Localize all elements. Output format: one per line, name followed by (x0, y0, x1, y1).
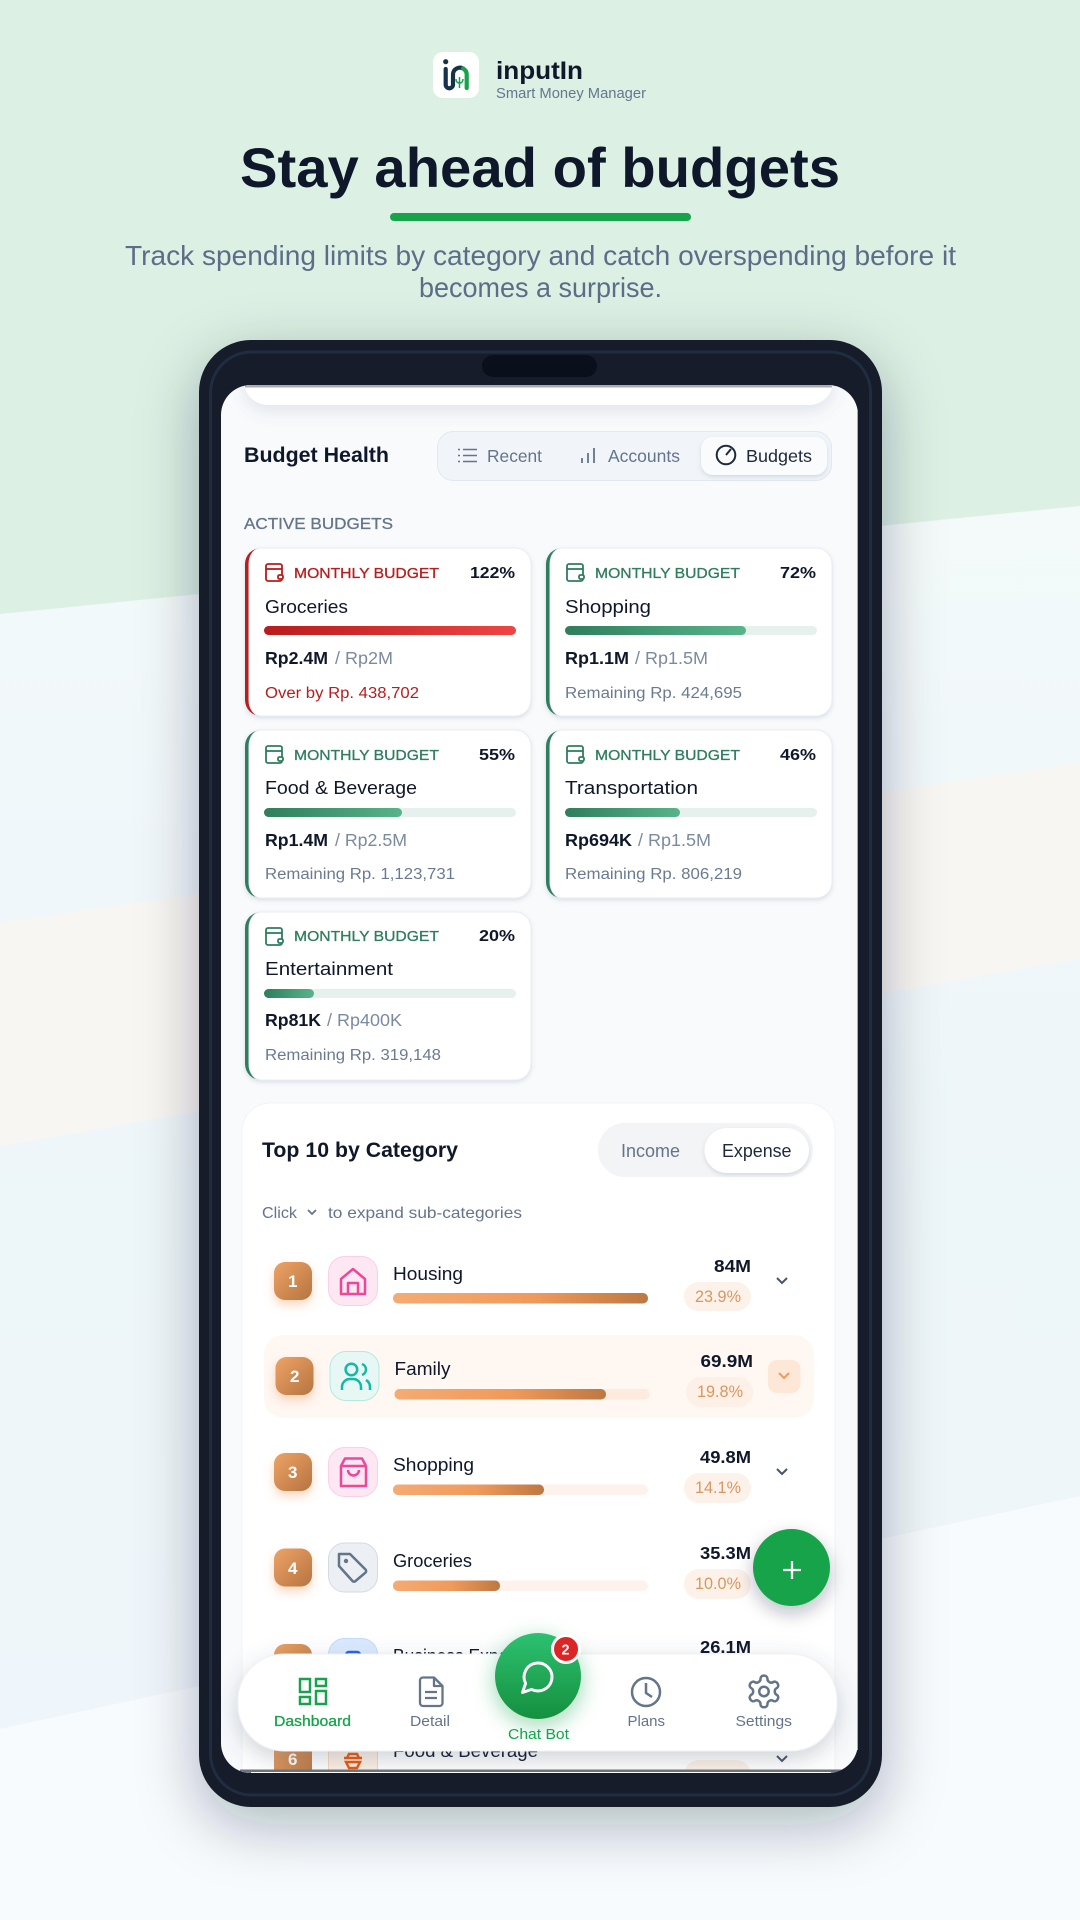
row 1: Housing: 1 (288, 1272, 297, 1291)
icon: wallet (567, 746, 584, 763)
toggle: income / expense (598, 1123, 813, 1177)
row 5: Business Expenses: 26.1M (700, 1637, 751, 1657)
row 5: Business Expenses (274, 1638, 750, 1655)
budget card: Shopping: Shopping (565, 596, 651, 617)
nav: Chat Bot: Chat Bot (508, 1726, 570, 1743)
phone mockup (199, 340, 882, 1823)
floating add button (753, 1529, 830, 1606)
nav: Dashboard (274, 1679, 351, 1730)
row 3: Shopping: 3 (288, 1463, 297, 1482)
icon: shopping bag (341, 1458, 366, 1486)
budget card: Shopping: Remaining Rp. 424,695 (565, 685, 742, 702)
budget card: Entertainment: MONTHLY BUDGET (294, 928, 439, 945)
budget card: Transportation: Rp694K (565, 830, 632, 850)
nav: Settings: Settings (736, 1713, 792, 1730)
icon: wallet (266, 564, 283, 581)
row 3: Shopping: 14.1% (695, 1479, 741, 1497)
budget card: Transportation: Remaining Rp. 806,219 (565, 866, 742, 883)
progress bar (565, 808, 817, 817)
budget card: Groceries: MONTHLY BUDGET (294, 565, 439, 582)
row 5: Business Expenses: Business Expenses (393, 1645, 545, 1666)
top card remnant (242, 385, 836, 414)
row 3: Shopping: Shopping (393, 1454, 474, 1475)
row 2: Family highlighted: 2 (290, 1367, 299, 1386)
budget card: Shopping (546, 548, 832, 716)
nav: Plans: Plans (628, 1713, 665, 1730)
budget card: Entertainment (245, 912, 531, 1080)
phone body (199, 340, 882, 1807)
tab: Recent (458, 448, 542, 462)
budget card: Entertainment: 20% (479, 928, 515, 945)
row 4: Groceries: Groceries (393, 1550, 472, 1571)
row 2: Family highlighted: 19.8% (697, 1383, 743, 1401)
toggle: income / expense: Income (621, 1141, 680, 1161)
brand tagline: Smart Money Manager (496, 85, 646, 102)
nav: Detail (410, 1678, 450, 1730)
row 4: Groceries: 4 (288, 1559, 298, 1578)
notch (482, 355, 597, 377)
brand name: inputIn (496, 57, 583, 85)
icon: wallet (266, 928, 283, 945)
nav: Plans (628, 1678, 665, 1730)
budget card: Food & Beverage: MONTHLY BUDGET (294, 747, 439, 764)
row 3: Shopping (274, 1447, 787, 1503)
row 1: Housing: 23.9% (695, 1288, 741, 1306)
budget card: Groceries: 122% (470, 565, 515, 582)
icon: tag (339, 1554, 366, 1582)
icon: food bowl (344, 1754, 362, 1768)
budget card: Food & Beverage: Remaining Rp. 1,123,731 (265, 866, 455, 883)
budget card: Transportation (546, 730, 832, 898)
row 6: Food & Beverage (274, 1750, 788, 1770)
hint text: to expand sub-categories (328, 1205, 522, 1222)
tabs (438, 432, 832, 480)
toggle: income / expense: Expense (722, 1141, 792, 1161)
row 2: Family highlighted: 69.9M (700, 1351, 753, 1371)
budget card: Shopping: 72% (780, 565, 816, 582)
hint text: Click (262, 1205, 298, 1222)
progress bar (264, 989, 516, 998)
budget card: Entertainment: Remaining Rp. 319,148 (265, 1047, 441, 1064)
notification badge: 2 (562, 1642, 570, 1658)
section heading: Budget Health: Budget Health (244, 443, 389, 467)
progress bar (264, 626, 516, 635)
phone screen (221, 340, 858, 1823)
budget card: Food & Beverage: Rp1.4M (265, 830, 328, 850)
budget card: Transportation: MONTHLY BUDGET (595, 747, 740, 764)
nav: Chat Bot (495, 1633, 581, 1743)
row 6: Food & Beverage: 6 (288, 1750, 297, 1769)
budget card: Transportation: / Rp1.5M (638, 830, 711, 850)
row 4: Groceries: 35.3M (700, 1543, 751, 1563)
icon: people (342, 1364, 370, 1390)
icon: wallet (567, 564, 584, 581)
progress bar (565, 626, 817, 635)
tab: Accounts (581, 448, 680, 463)
nav: Dashboard: Dashboard (274, 1713, 351, 1730)
label: active budgets: ACTIVE BUDGETS (244, 516, 393, 533)
budget card: Groceries: / Rp2M (335, 648, 393, 668)
budget card: Food & Beverage (245, 730, 531, 898)
row 2: Family highlighted: Family (394, 1358, 451, 1379)
row 1: Housing (274, 1256, 787, 1311)
icon: wallet (266, 746, 283, 763)
budget card: Shopping: Rp1.1M (565, 648, 629, 668)
icon: house (341, 1269, 365, 1294)
budget card: Entertainment: / Rp400K (327, 1010, 402, 1030)
icon: chat bubble (522, 1663, 552, 1692)
budget card: Food & Beverage: / Rp2.5M (335, 830, 407, 850)
subtitle: Track spending limits by category and catch overspending before it (125, 240, 956, 271)
tab: Accounts: Accounts (608, 446, 680, 466)
tab: Budgets active: Budgets (746, 446, 812, 466)
bottom navigation (238, 1633, 837, 1751)
row 3: Shopping: 49.8M (700, 1447, 751, 1467)
progress bar (264, 808, 516, 817)
row 4: Groceries (274, 1543, 751, 1599)
budget card: Groceries (245, 548, 531, 716)
budget card: Groceries: Groceries (265, 596, 348, 617)
subtitle: becomes a surprise. (419, 272, 662, 303)
subtitle (125, 240, 956, 303)
row 2: Family highlighted (264, 1335, 814, 1418)
tab: Budgets active (701, 437, 827, 475)
budget card: Transportation: Transportation (565, 777, 698, 798)
panel heading: Top 10 by Category (262, 1138, 458, 1162)
budget card: Entertainment: Rp81K (265, 1010, 321, 1030)
title: Stay ahead of budgets (240, 136, 840, 199)
budget card: Groceries: Rp2.4M (265, 648, 328, 668)
row 4: Groceries: 10.0% (695, 1575, 741, 1593)
budget card: Shopping: MONTHLY BUDGET (595, 565, 740, 582)
icon: briefcase (345, 1650, 361, 1654)
icon: inputIn logo (433, 52, 479, 98)
budget card: Transportation: 46% (780, 747, 816, 764)
row 1: Housing: 84M (714, 1256, 751, 1276)
row 6: Food & Beverage: Food & Beverage (393, 1740, 538, 1761)
budget card: Food & Beverage: 55% (479, 747, 515, 764)
budget card: Entertainment: Entertainment (265, 958, 393, 979)
title underline (390, 213, 691, 221)
nav: Settings (736, 1676, 792, 1730)
budget card: Groceries: Over by Rp. 438,702 (265, 685, 419, 702)
logo and brand (433, 52, 646, 102)
tab: Recent: Recent (487, 446, 542, 466)
row 1: Housing: Housing (393, 1263, 463, 1284)
nav: Detail: Detail (410, 1713, 450, 1730)
panel: top 10 by category (242, 1126, 836, 1773)
hint text (262, 1206, 522, 1222)
budget card: Shopping: / Rp1.5M (635, 648, 708, 668)
budget card: Food & Beverage: Food & Beverage (265, 777, 417, 798)
